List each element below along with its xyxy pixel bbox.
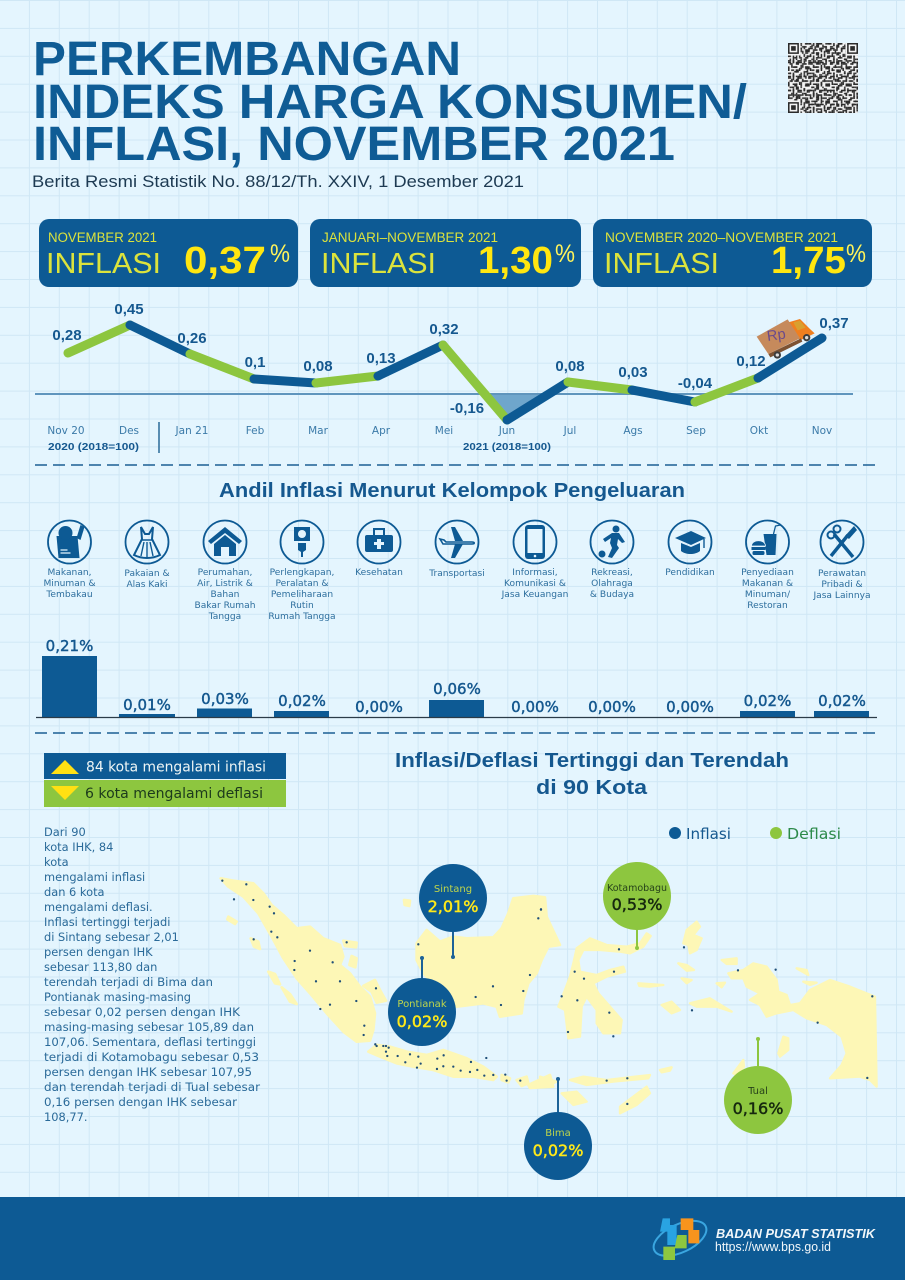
group labels: Alas Kaki: [126, 580, 168, 590]
group labels: Minuman/: [745, 590, 791, 600]
bar chart: contribution by group: 0,21%: [46, 637, 93, 655]
title: INFLASI, NOVEMBER 2021: [33, 118, 675, 171]
bar chart: contribution by group: 0,00%: [588, 698, 636, 716]
callout: Bima: Bima: [545, 1128, 571, 1139]
line chart: monthly inflation: 0,1: [245, 354, 265, 371]
group labels: Informasi,: [512, 568, 558, 578]
heading: highest and lowest in 90 cities: [395, 750, 789, 799]
text block: summary: masing-masing sebesar 105,89 dan: [44, 1020, 254, 1034]
group labels: Rutin: [290, 601, 314, 611]
line chart: monthly inflation: Nov: [812, 425, 832, 437]
bar chart: contribution by group: 0,00%: [511, 698, 559, 716]
text block: summary: terjadi di Kotamobagu sebesar 0,53: [44, 1050, 259, 1064]
panel: inflasi November 2021: INFLASI: [46, 248, 161, 280]
line chart: monthly inflation: -0,16: [450, 400, 484, 417]
group labels: Komunikasi &: [504, 579, 566, 589]
legend: cities with deflation: 6 kota mengalami deflasi: [85, 786, 263, 802]
callout: Bima: 0,02%: [533, 1141, 583, 1160]
eastern islands: [540, 922, 877, 1113]
legend: cities with deflation: [44, 780, 286, 807]
callout: Kotamobagu: [603, 862, 671, 950]
line chart: monthly inflation: Apr: [372, 425, 391, 437]
callout: Sintang: Sintang: [434, 884, 472, 895]
legend: cities with inflation: [44, 753, 286, 779]
text block: summary: Inflasi tertinggi terjadi: [44, 915, 170, 929]
bar chart: contribution by group: 0,06%: [433, 680, 481, 698]
line chart: monthly inflation: Nov 20: [47, 425, 85, 437]
panel: inflasi November 2020–November 2021: NOVEMBER 2020–NOVEMBER 2021: [605, 230, 838, 245]
group labels: Tangga: [208, 612, 241, 622]
group labels: Olahraga: [591, 579, 633, 589]
title: PERKEMBANGAN: [33, 33, 461, 86]
text block: summary: dan terendah terjadi di Tual sebesar: [44, 1080, 260, 1094]
footer text: BADAN PUSAT STATISTIK: [716, 1227, 876, 1241]
line chart: monthly inflation: 0,37: [819, 315, 849, 332]
western islands: [221, 878, 560, 1088]
bar chart: contribution by group: 0,00%: [355, 698, 403, 716]
icon: medical kit: [358, 520, 400, 564]
text block: summary: 107,06. Sementara, deflasi tertinggi: [44, 1035, 256, 1049]
line chart: monthly inflation: Sep: [686, 425, 706, 437]
panel: inflasi November 2020–November 2021: INFLASI: [604, 248, 719, 280]
panel: inflasi November 2021: %: [270, 240, 290, 268]
text block: summary: sebesar 113,80 dan: [44, 960, 157, 974]
group labels: Rekreasi,: [591, 568, 633, 578]
bar chart: contribution by group: 0,02%: [278, 692, 326, 710]
line chart: monthly inflation: 0,32: [429, 321, 459, 338]
map: Indonesia: [221, 878, 877, 1113]
group labels: Tembakau: [45, 590, 93, 600]
line chart: monthly inflation: Jul: [563, 425, 576, 437]
text block: summary: kota: [44, 855, 69, 869]
icon: burger and drink: [746, 520, 789, 564]
text block: summary: kota IHK, 84: [44, 840, 113, 854]
text block: summary: mengalami inflasi: [44, 870, 145, 884]
line chart: monthly inflation: 0,03: [618, 364, 648, 381]
bar chart: contribution by group: 0,02%: [744, 692, 791, 710]
group labels: Perawatan: [818, 569, 866, 579]
group labels: Jasa Keuangan: [501, 590, 568, 600]
line chart: monthly inflation: Mar: [308, 425, 329, 437]
footer text: [715, 1227, 876, 1254]
QR code: [788, 43, 858, 113]
icon: scissors and comb: [820, 520, 864, 564]
line chart: monthly inflation: Mei: [435, 425, 453, 437]
callout: Sintang: [419, 864, 487, 959]
panel: inflasi Januari–November 2021: 1,30: [478, 240, 553, 282]
line chart: monthly inflation: Des: [119, 425, 139, 437]
group labels: & Budaya: [590, 590, 634, 600]
panel: inflasi November 2021: NOVEMBER 2021: [48, 230, 157, 245]
line chart: monthly inflation: 0,45: [114, 301, 144, 318]
group labels: Air, Listrik &: [197, 579, 253, 589]
text block: summary: [44, 825, 260, 1124]
group labels: Perumahan,: [198, 568, 252, 578]
group labels: Pemeliharaan: [271, 590, 333, 600]
callout: Kotamobagu: Kotamobagu: [607, 883, 667, 894]
group labels: [43, 568, 871, 622]
group labels: Jasa Lainnya: [812, 591, 871, 601]
footer text: https://www.bps.go.id: [715, 1240, 831, 1254]
heading: andil inflasi: Andil Inflasi Menurut Kelompok Pengeluaran: [219, 480, 685, 502]
panel: inflasi November 2021: [39, 219, 298, 287]
group labels: Makanan,: [47, 568, 92, 578]
text block: summary: 0,16 persen dengan IHK sebesar: [44, 1095, 237, 1109]
icon: dress: [126, 520, 168, 564]
title: [33, 33, 747, 171]
panel: inflasi Januari–November 2021: JANUARI–NOVEMBER 2021: [322, 230, 498, 245]
group labels: Kesehatan: [355, 568, 403, 578]
icon: delivery truck: Rp: [766, 327, 787, 345]
icon: house: [204, 520, 246, 564]
panel: inflasi Januari–November 2021: [310, 219, 581, 287]
city dots: [222, 881, 541, 1081]
text block: summary: dan 6 kota: [44, 885, 105, 899]
panel: inflasi Januari–November 2021: INFLASI: [321, 248, 436, 280]
line chart: monthly inflation: Okt: [750, 425, 768, 437]
text block: summary: persen dengan IHK sebesar 107,95: [44, 1065, 252, 1079]
callout: Sintang: 2,01%: [428, 897, 478, 916]
bar chart: contribution by group: 0,00%: [666, 698, 714, 716]
group labels: Makanan &: [742, 579, 793, 589]
line chart: monthly inflation: [35, 301, 853, 453]
bar chart: contribution by group: [36, 637, 877, 718]
group labels: Bahan: [211, 590, 239, 600]
callout: Tual: 0,16%: [733, 1099, 783, 1118]
map legend: [669, 825, 841, 843]
line chart: monthly inflation: 0,28: [52, 327, 82, 344]
icon: smartphone: [514, 520, 556, 564]
text block: summary: Dari 90: [44, 825, 86, 839]
line chart: monthly inflation: 2021 (2018=100): [463, 442, 551, 453]
callout: Pontianak: [388, 956, 456, 1046]
callout: Tual: [724, 1037, 792, 1134]
legend: cities with inflation: 84 kota mengalami inflasi: [86, 760, 266, 776]
footer band: [0, 1197, 905, 1280]
callout: Pontianak: 0,02%: [397, 1012, 447, 1031]
panel: inflasi November 2021: 0,37: [184, 240, 266, 282]
text block: summary: sebesar 0,02 persen dengan IHK: [44, 1005, 241, 1019]
subtitle: Berita Resmi Statistik No. 88/12/Th. XXIV, 1 Desember 2021: [32, 172, 524, 191]
callout: Tual: Tual: [747, 1086, 768, 1097]
bar chart: contribution by group: 0,02%: [818, 692, 866, 710]
line chart: monthly inflation: 2020 (2018=100): [48, 442, 139, 453]
icon: plug: [280, 520, 324, 564]
text block: summary: Pontianak masing-masing: [44, 990, 191, 1004]
group labels: Transportasi: [428, 569, 485, 579]
map legend: Inflasi: [686, 825, 731, 843]
line chart: monthly inflation: Ags: [623, 425, 643, 437]
line chart: monthly inflation: 0,26: [177, 330, 207, 347]
icon: airplane: [436, 520, 478, 564]
line chart: monthly inflation: Feb: [246, 425, 265, 437]
line chart: monthly inflation: 0,08: [555, 358, 585, 375]
callout: Bima: [524, 1077, 592, 1180]
icon: soccer player: [590, 520, 634, 564]
map legend: Deflasi: [787, 825, 841, 843]
line chart: monthly inflation: Jun: [498, 425, 515, 437]
group labels: Rumah Tangga: [268, 612, 336, 622]
text block: summary: mengalami deflasi.: [44, 900, 153, 914]
panel: inflasi November 2020–November 2021: 1,75: [771, 240, 846, 282]
panel: inflasi November 2020–November 2021: %: [846, 240, 866, 268]
icon: graduation cap: [668, 520, 712, 564]
title: INDEKS HARGA KONSUMEN/: [33, 76, 747, 129]
text block: summary: 108,77.: [44, 1110, 87, 1124]
group labels: Restoran: [747, 601, 788, 611]
group labels: Pendidikan: [665, 568, 715, 578]
group labels: Bakar Rumah: [194, 601, 256, 611]
panel: inflasi Januari–November 2021: %: [555, 240, 575, 268]
text block: summary: terendah terjadi di Bima dan: [44, 975, 213, 989]
line chart: monthly inflation: 0,13: [366, 350, 396, 367]
line chart: monthly inflation: -0,04: [678, 375, 713, 392]
text block: summary: di Sintang sebesar 2,01: [44, 930, 179, 944]
heading: highest and lowest in 90 cities: di 90 Kota: [536, 777, 648, 799]
panel: inflasi November 2020–November 2021: [593, 219, 872, 287]
text block: summary: persen dengan IHK: [44, 945, 153, 959]
group labels: Minuman &: [43, 579, 96, 589]
callout: Pontianak: Pontianak: [397, 999, 447, 1010]
line chart: monthly inflation: 0,12: [736, 353, 766, 370]
line chart: monthly inflation: Jan 21: [175, 425, 208, 437]
group labels: Perlengkapan,: [270, 568, 334, 578]
bar chart: contribution by group: 0,01%: [123, 696, 171, 714]
icon: delivery truck: [757, 319, 815, 359]
group labels: Peralatan &: [275, 579, 329, 589]
heading: highest and lowest in 90 cities: Inflasi/Deflasi Tertinggi dan Terendah: [395, 750, 789, 772]
icon: food: [48, 520, 91, 564]
icon row: expenditure groups: [48, 520, 864, 564]
group labels: Pribadi &: [821, 580, 863, 590]
group labels: Penyediaan: [741, 568, 794, 578]
group labels: Pakaian &: [124, 569, 170, 579]
callout: Kotamobagu: 0,53%: [612, 895, 662, 914]
line chart: monthly inflation: 0,08: [303, 358, 333, 375]
logo: BPS: [648, 1214, 712, 1263]
bar chart: contribution by group: 0,03%: [201, 690, 249, 708]
